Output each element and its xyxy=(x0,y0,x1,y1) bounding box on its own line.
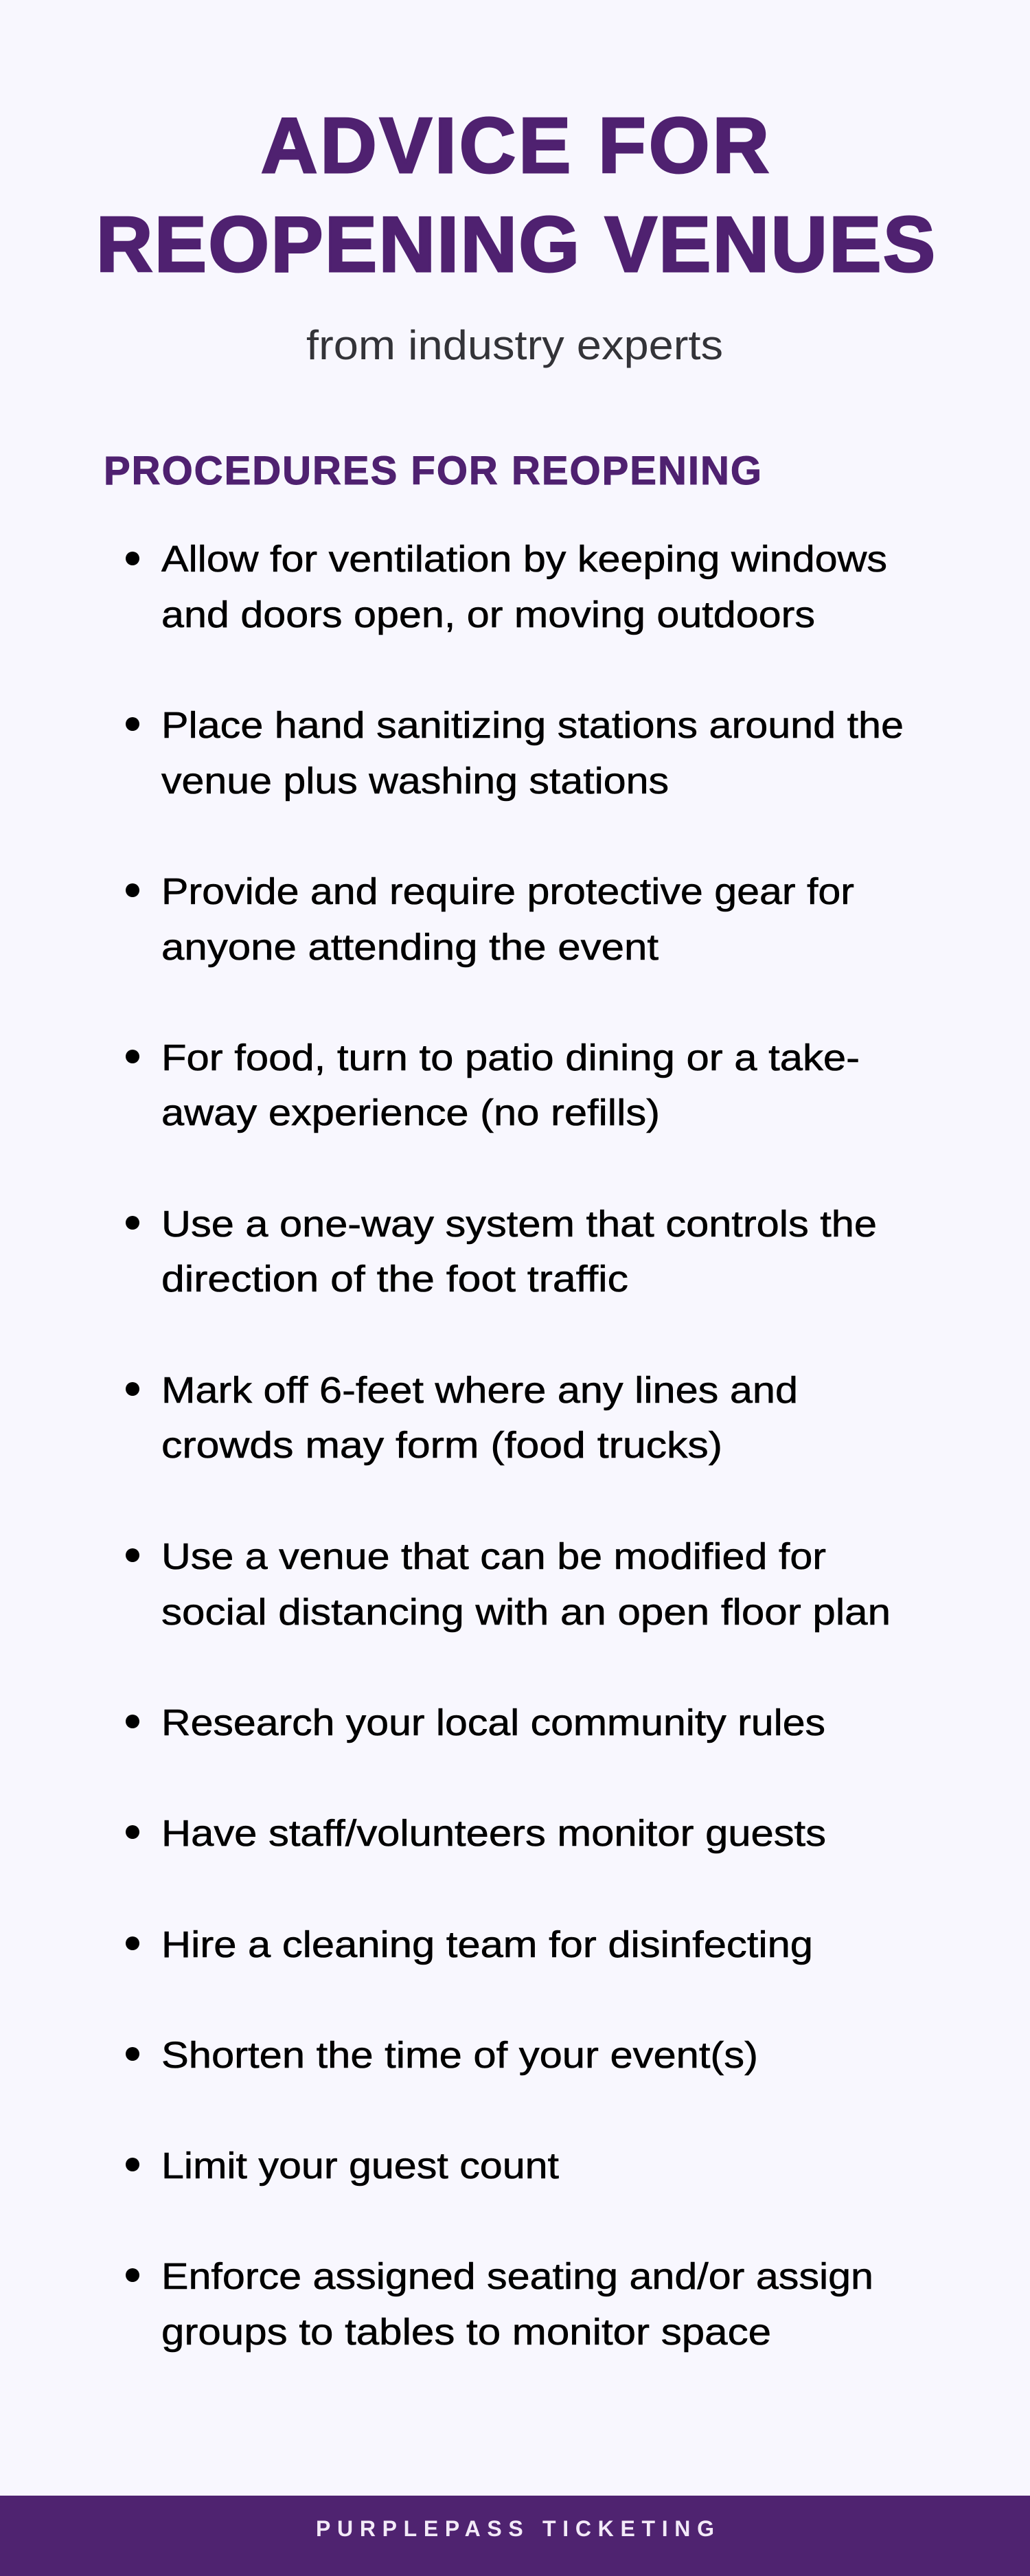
list item: shorten event: Shorten the time of your event(s) xyxy=(161,2035,758,2076)
subtitle: from industry experts xyxy=(306,322,723,368)
list item: one-way system xyxy=(126,1204,877,1300)
title xyxy=(96,102,935,289)
list item: sanitizing stations xyxy=(126,705,904,802)
list item: modified venue: social distancing with an open floor plan xyxy=(161,1592,891,1633)
list item: assigned seating xyxy=(126,2256,873,2353)
list item: ventilation xyxy=(126,539,887,635)
list item: assigned seating: Enforce assigned seating and/or assign xyxy=(161,2256,873,2297)
list item: protective gear xyxy=(126,871,854,968)
list item: sanitizing stations: Place hand sanitizing stations around the xyxy=(161,705,904,746)
list item: 6-feet: crowds may form (food trucks) xyxy=(161,1425,722,1466)
list item: one-way system: direction of the foot traffic xyxy=(161,1258,628,1300)
list item: one-way system: Use a one-way system that controls the xyxy=(161,1204,877,1245)
list item: 6-feet xyxy=(126,1370,798,1466)
list item: ventilation: Allow for ventilation by keeping windows xyxy=(161,539,887,580)
list item: food xyxy=(126,1037,860,1133)
list item: cleaning team: Hire a cleaning team for disinfecting xyxy=(161,1924,813,1965)
title: REOPENING VENUES xyxy=(96,201,935,289)
section heading: PROCEDURES FOR REOPENING xyxy=(104,449,762,493)
list item: sanitizing stations: venue plus washing stations xyxy=(161,760,669,802)
list item: assigned seating: groups to tables to monitor space xyxy=(161,2312,771,2353)
list item: community rules: Research your local community rules xyxy=(161,1702,825,1743)
list item: modified venue xyxy=(126,1536,891,1633)
list item: ventilation: and doors open, or moving outdoors xyxy=(161,594,815,635)
list item: food: away experience (no refills) xyxy=(161,1092,660,1133)
list item: modified venue: Use a venue that can be modified for xyxy=(161,1536,826,1577)
list item: protective gear: anyone attending the event xyxy=(161,927,659,968)
footer band xyxy=(0,2496,1030,2576)
title: ADVICE FOR xyxy=(261,102,769,190)
list item: guest count: Limit your guest count xyxy=(161,2145,559,2187)
panel: procedures list xyxy=(126,539,904,2353)
footer text: PURPLEPASS TICKETING xyxy=(316,2516,714,2541)
list item: 6-feet: Mark off 6-feet where any lines and xyxy=(161,1370,798,1411)
list item: monitor guests: Have staff/volunteers monitor guests xyxy=(161,1813,826,1854)
list item: food: For food, turn to patio dining or a take- xyxy=(161,1037,860,1078)
list item: protective gear: Provide and require protective gear for xyxy=(161,871,854,912)
